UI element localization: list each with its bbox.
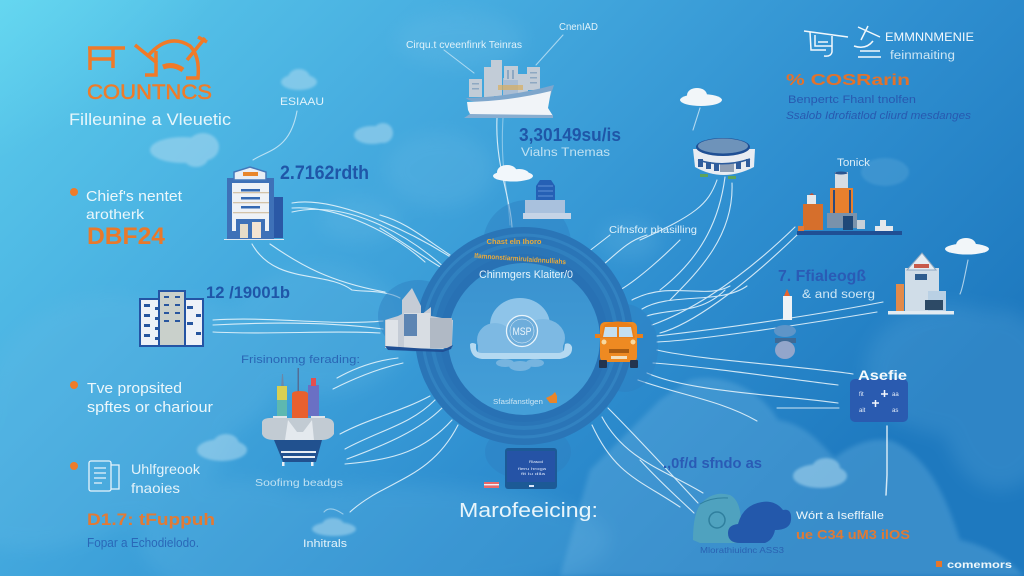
icon: calculator card: as [892, 408, 898, 414]
bullet: chiefs: DBF24 [87, 223, 166, 250]
icon: orange car [595, 322, 643, 368]
panel: top right heading: feinmaiting [890, 50, 955, 62]
label: rig heading: Frisinonmg ferading: [241, 354, 360, 366]
footer credit [936, 559, 1012, 571]
icon: hotel building [224, 167, 284, 240]
panel: top right heading: Ssalob Idrofiatlod cliurd mesdanges [786, 110, 972, 122]
label: factory: Tonick [837, 157, 871, 169]
panel: top right heading: % COSRarin [786, 72, 910, 89]
ring caption: Sfaslfanstlgen [493, 399, 543, 406]
icon: laptop: fieru hroga [518, 466, 547, 471]
icon: calculator card: fit [859, 392, 864, 398]
icon: laptop: fit lu dila [521, 471, 546, 476]
stat: rocket [778, 268, 875, 301]
icon: rocket [774, 289, 796, 359]
bullet: handbook: Fopar a Echodielodo. [87, 536, 199, 550]
logo mark [88, 37, 207, 78]
label: bottom cloud: Inhitrals [303, 538, 348, 550]
block: bottom right text: ue C34 uM3 ilOS [796, 527, 910, 542]
icon: calculator card: ait [859, 408, 866, 414]
icon: domed stadium [693, 138, 755, 179]
label: right of ring: Cifnsfor phasilling [609, 225, 697, 236]
panel: top right heading: Benpertc Fhanl tnolfen [788, 94, 916, 106]
title tagline: Filleunine a Vleuetic [69, 110, 232, 129]
icon: document [89, 461, 119, 491]
icon: shop building [888, 253, 954, 314]
connector lines [213, 35, 968, 514]
ring title: Chinmgers Klaiter/0 [479, 269, 573, 281]
block: bottom right text: Wórt a Iseflfalle [796, 510, 884, 522]
footer credit: comemors [947, 559, 1012, 571]
title block [69, 37, 232, 129]
icon: laptop [484, 448, 557, 489]
ring halo blobs [378, 200, 658, 480]
icon: calculator card: aa [892, 392, 899, 398]
bullet: chiefs: arotherk [86, 206, 145, 222]
ring label: arc heading: Ifamnonstiarmirulaidnnulliahs [474, 253, 566, 266]
icon: central cloud with emblem [470, 298, 572, 371]
bullet: handbook [70, 461, 215, 550]
bullet: propsited: Tve propsited [87, 381, 182, 397]
bullet: handbook: fnaoies [131, 480, 180, 496]
bullet: handbook: Uhlfgreook [131, 461, 201, 477]
icon: cloud above ring [493, 165, 533, 182]
icon: factory [797, 172, 902, 235]
stat: lower right: .,0f/d sfndo as [663, 455, 762, 472]
panel: top right heading [786, 26, 974, 122]
stat: hotel number: 2.7162rdth [280, 163, 369, 184]
block: bottom right text [700, 510, 910, 555]
icon: tower on ring [385, 288, 453, 352]
label: factory [837, 157, 909, 186]
icon: laptop: Rlasod [529, 459, 543, 464]
panel: top right heading: EMMNNMENIE [885, 30, 974, 44]
icon: office block [140, 291, 203, 346]
decorative clouds [150, 69, 989, 536]
stat: ship number: 3,30149su/is [519, 125, 621, 145]
stat: ship number [519, 125, 621, 159]
icon: offshore rig [262, 368, 334, 466]
icon: small factory above ring [523, 180, 571, 219]
label: cloud top left: ESIAAU [280, 96, 324, 108]
stat: rocket: & and soerg [802, 289, 875, 301]
bullet: chiefs [70, 188, 182, 250]
icon: bottom cloud pair [693, 494, 791, 543]
bullet: chiefs: Chief's nentet [86, 189, 182, 205]
icon: calculator card [850, 379, 908, 422]
icon: city ship [464, 60, 554, 118]
label: bottom centre heading: Marofeeicing: [459, 500, 598, 522]
stat: rocket: 7. Ffialeogß [778, 268, 866, 285]
stat: office number: 12 /19001b [206, 283, 290, 302]
ring label: arc heading: Chast eln Ihoro [486, 239, 542, 246]
bullet: propsited [70, 381, 213, 416]
label: ship left: Cirqu.t cveenfinrk Teinras [406, 39, 522, 51]
ring caption [493, 392, 557, 406]
label: rig caption: Soofimg beadgs [255, 477, 343, 489]
bullet: propsited: spftes or chariour [87, 400, 213, 416]
block: bottom right text: Mlorathiuidnc ASS3 [700, 546, 785, 555]
icon: central cloud with emblem: MSP [512, 326, 532, 338]
icon: brand glyphs [804, 26, 881, 57]
stat: ship number: Vialns Tnemas [521, 147, 610, 159]
label: card heading: Asefie [858, 367, 907, 383]
ring label: arc heading [474, 239, 566, 266]
logo subtitle: COUNTNCS [87, 81, 212, 104]
bullet: handbook: D1.7: tFuppuh [87, 510, 215, 529]
panel: central ring [378, 200, 658, 480]
label: ship right: CnenIAD [559, 21, 598, 33]
